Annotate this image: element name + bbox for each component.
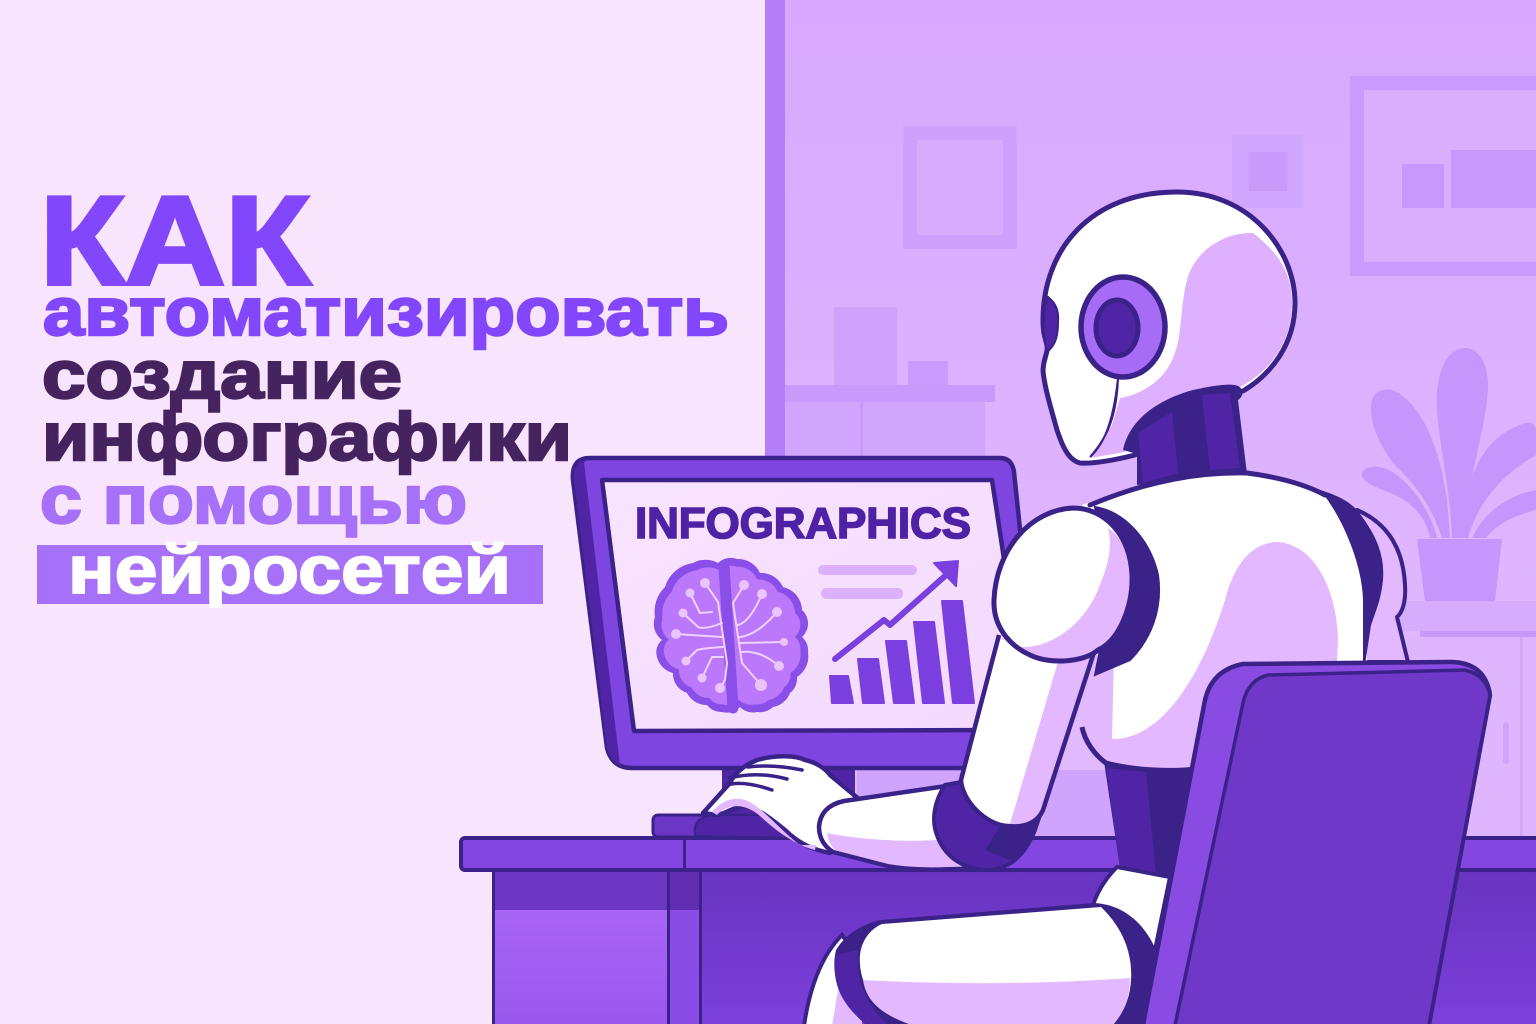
shelf with boxes: [785, 307, 995, 462]
hip: [1093, 867, 1170, 950]
wall picture square: [1232, 135, 1303, 208]
waist: [1103, 755, 1196, 880]
screen heading: INFOGRAPHICS: [635, 499, 971, 548]
chair back panel: [1174, 670, 1490, 1024]
brain icon: [654, 558, 808, 713]
room wall: [765, 0, 1536, 840]
highlight banner: нейросетей: [68, 532, 511, 608]
desk: [461, 815, 1536, 1024]
back dark crescent: [1323, 492, 1382, 665]
title block: [37, 170, 729, 608]
thigh: [804, 903, 1156, 1024]
forearm: [819, 784, 975, 869]
bar chart: [830, 601, 974, 703]
desk top slab: [461, 838, 1536, 870]
lower leg: [804, 935, 860, 1024]
thigh dark body: [834, 903, 1156, 1024]
title line: создание: создание: [42, 337, 402, 413]
text placeholder pills: [818, 565, 917, 599]
title word КАК: КАК: [40, 170, 311, 311]
head outline: [1043, 192, 1295, 463]
hand: [703, 756, 860, 853]
keyboard: [653, 815, 753, 837]
title line: автоматизировать: автоматизировать: [43, 274, 729, 350]
chair side: [1142, 662, 1490, 1024]
torso outline: [1090, 473, 1325, 505]
left drawer pedestal: [492, 870, 702, 1024]
head: [1043, 192, 1295, 463]
title line: инфографики: инфографики: [42, 399, 572, 475]
mouse: [695, 815, 800, 838]
left background panel: [0, 0, 765, 1024]
potted plant: [1362, 348, 1536, 601]
bezel left shade: [574, 459, 620, 765]
monitor screen: [602, 480, 1030, 731]
face visor: [1044, 297, 1058, 352]
robot: [703, 192, 1490, 1024]
jaw line: [1090, 378, 1118, 457]
chair: [1142, 662, 1490, 1024]
wall picture small frame: [903, 126, 1017, 249]
upper arm: [961, 635, 1100, 826]
neck: [1123, 385, 1247, 485]
monitor bezel: [573, 458, 1045, 768]
torso: [1082, 473, 1382, 771]
elbow joint: [934, 775, 1045, 870]
shoulder dark crescent: [1095, 507, 1159, 675]
wall panel behind arm: [857, 770, 1117, 840]
back plate: [1357, 510, 1408, 662]
torso shading: [1082, 542, 1338, 771]
shoulder: [994, 508, 1132, 661]
head shading: [1090, 233, 1292, 458]
monitor: [573, 458, 1045, 820]
thigh white: [860, 907, 1131, 1024]
desk front: [493, 870, 1536, 1024]
monitor stand: [722, 760, 855, 820]
wall picture large frame: [1350, 76, 1536, 276]
side table: [1400, 601, 1536, 840]
ear: [1081, 277, 1165, 377]
title line: с помощью: с помощью: [40, 462, 467, 538]
growth arrow: [835, 561, 958, 659]
